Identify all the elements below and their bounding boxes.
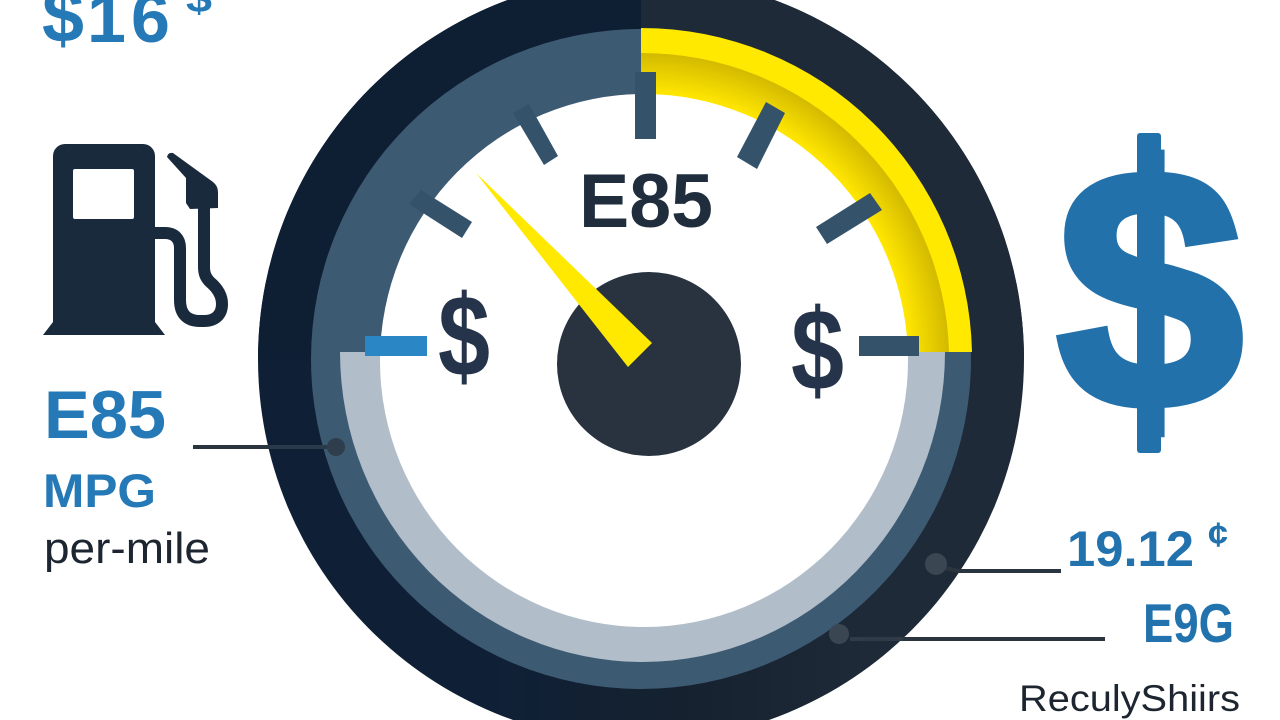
right value 19.12 cents: ¢	[1208, 516, 1228, 554]
left label E85: E85	[44, 377, 166, 453]
leader line: left	[193, 438, 345, 456]
gauge white face	[380, 94, 908, 627]
right dollar sign: $	[791, 285, 844, 415]
gauge	[258, 0, 1024, 720]
gauge hub	[557, 272, 741, 456]
top-left price text	[42, 0, 212, 59]
yellow arc segment	[641, 28, 972, 352]
left dollar sign: $	[438, 271, 490, 401]
icon: fuel pump	[43, 144, 222, 335]
gauge label E85: E85	[579, 159, 713, 244]
leader line: value	[925, 553, 1061, 575]
gauge outer bezel	[258, 0, 1024, 720]
left label per-mile: per-mile	[44, 524, 210, 573]
leader line: label	[829, 624, 1105, 644]
bottom-right caption: ReculyShiirs	[1019, 678, 1240, 719]
right label E9G: E9G	[1143, 592, 1234, 654]
needle	[476, 173, 652, 367]
gauge steel ring	[311, 29, 971, 689]
right value 19.12 cents: 19.12	[1067, 521, 1194, 577]
big dollar sign: $	[1057, 100, 1243, 480]
left label MPG: MPG	[43, 464, 156, 517]
light lower ring	[340, 352, 945, 662]
tick marks	[365, 72, 919, 356]
